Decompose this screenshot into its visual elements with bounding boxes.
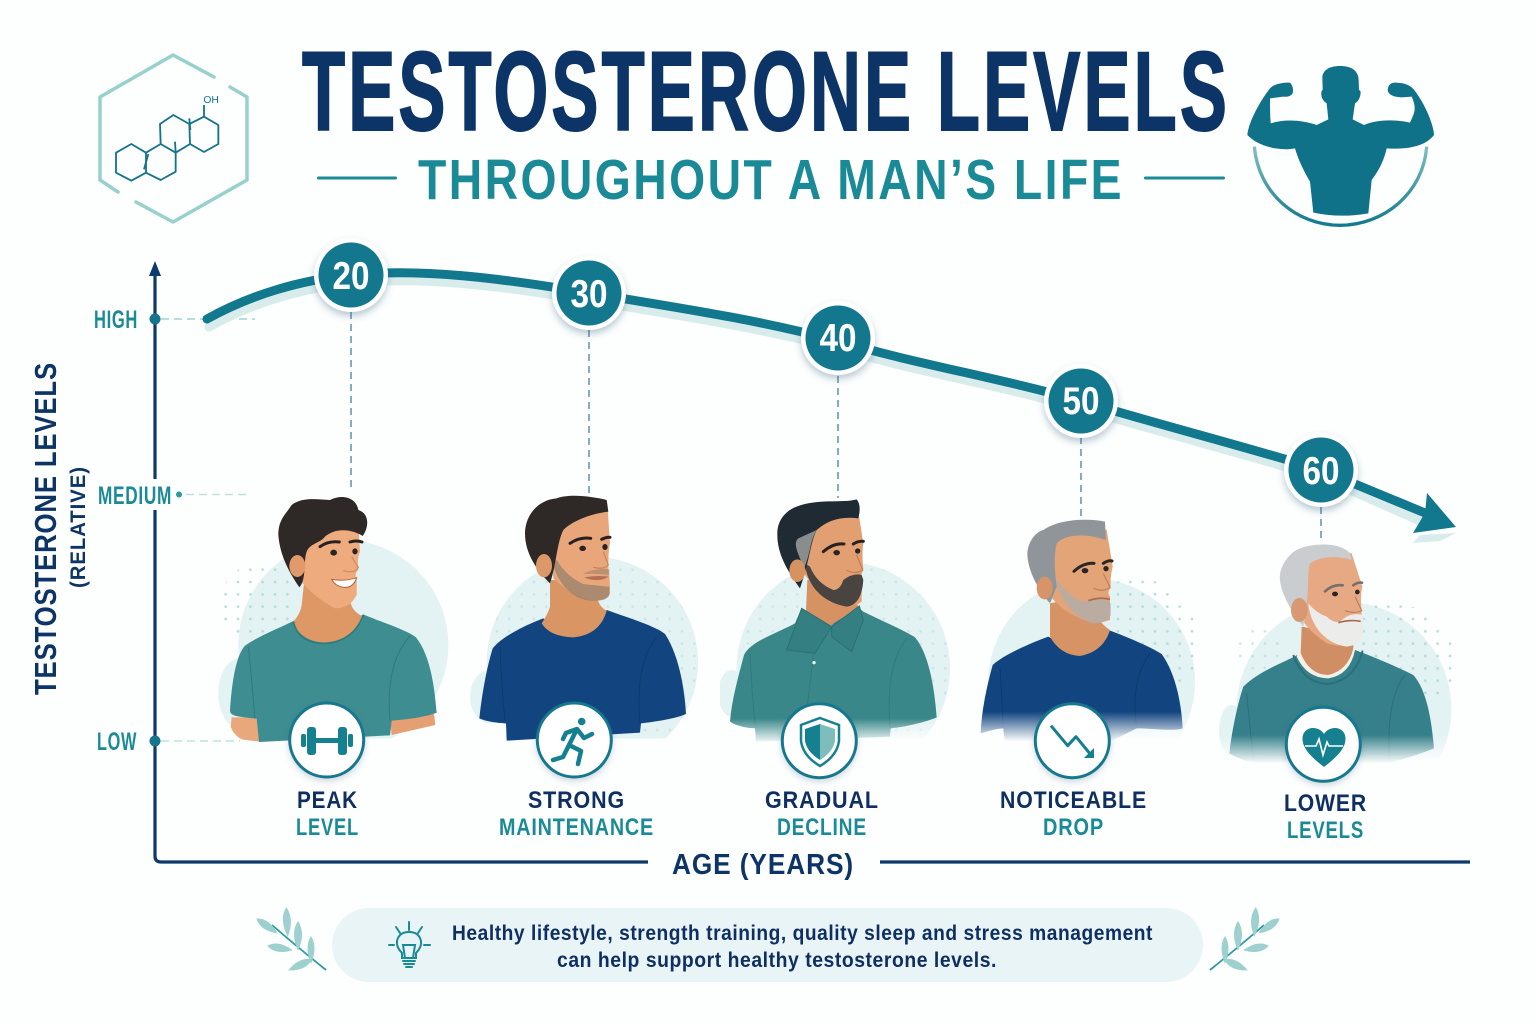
- label: strong maintenance: STRONG: [528, 787, 625, 814]
- tip text: can help support healthy testosterone levels.: [557, 949, 997, 972]
- declining curve: [207, 273, 1456, 543]
- icon: falling trend arrow: [1035, 704, 1109, 778]
- age marker: 40: 40: [820, 317, 856, 360]
- y axis title: TESTOSTERONE LEVELS: [28, 362, 63, 695]
- age marker: 60: 60: [1302, 450, 1340, 493]
- label: lower levels: [1284, 790, 1367, 844]
- icon: molecule hexagon: [100, 55, 247, 222]
- stage: age 50 noticeable drop: [973, 520, 1203, 841]
- label: gradual decline: GRADUAL: [765, 787, 879, 814]
- label: noticeable drop: DROP: [1043, 814, 1104, 841]
- axis level: high: HIGH: [94, 306, 138, 334]
- icon: shield: [782, 704, 856, 778]
- axes: [149, 261, 1470, 862]
- y axis title: [28, 362, 90, 695]
- label: noticeable drop: NOTICEABLE: [1000, 787, 1147, 814]
- label: peak level: PEAK: [297, 787, 358, 814]
- label: peak level: [296, 787, 359, 841]
- label: peak level: LEVEL: [296, 814, 359, 841]
- icon: light bulb: [389, 922, 430, 967]
- icon: left leaves: [254, 907, 326, 974]
- portrait: man with beard and shirt: [720, 499, 950, 742]
- age marker: 50: [1044, 364, 1118, 438]
- age marker: 20: 20: [332, 255, 370, 298]
- age marker: 60: [1284, 433, 1358, 507]
- stage: age 20 peak level: [218, 497, 448, 841]
- age marker: 50: 50: [1062, 380, 1100, 423]
- axis level: low: [97, 728, 240, 756]
- age marker: 30: [552, 256, 626, 330]
- label: gradual decline: DECLINE: [777, 814, 867, 841]
- label: lower levels: LOWER: [1284, 790, 1367, 817]
- y axis title: (RELATIVE): [67, 466, 90, 588]
- portrait: older man with white beard: [1219, 544, 1452, 762]
- axis level: high: [94, 306, 255, 334]
- stage: age 30 strong maintenance: [470, 496, 698, 841]
- label: noticeable drop: [1000, 787, 1147, 841]
- stage: age 60 lower levels: [1217, 545, 1460, 844]
- label: lower levels: LEVELS: [1287, 817, 1364, 844]
- icon: muscular man: [1247, 66, 1434, 225]
- tip text: Healthy lifestyle, strength training, quality sleep and stress management: [452, 922, 1153, 945]
- subtitle: THROUGHOUT A MAN’S LIFE: [418, 148, 1124, 212]
- age marker: 40: [801, 301, 875, 375]
- portrait: grey haired man: [980, 520, 1195, 740]
- stage: age 40 gradual decline: [718, 499, 953, 841]
- label: strong maintenance: [499, 787, 654, 841]
- icon: heart with pulse: [1286, 707, 1360, 781]
- portrait: young man: [218, 497, 448, 750]
- age marker: 30: 30: [570, 273, 608, 316]
- icon: runner: [537, 703, 611, 777]
- icon: right leaves: [1210, 907, 1282, 974]
- callout: healthy lifestyle tip: [332, 908, 1203, 982]
- connector lines: [351, 312, 1321, 543]
- label: gradual decline: [765, 787, 879, 841]
- icon: molecule hexagon: OH: [203, 95, 219, 106]
- axis level: low: LOW: [97, 728, 137, 756]
- icon: dumbbell: [290, 703, 364, 777]
- portrait: man with stubble: [470, 496, 698, 768]
- axis level: medium: MEDIUM: [98, 482, 172, 510]
- age marker: 20: [314, 238, 388, 312]
- x axis label: AGE (YEARS): [672, 849, 854, 881]
- label: strong maintenance: MAINTENANCE: [499, 814, 654, 841]
- tip text: [452, 922, 1153, 972]
